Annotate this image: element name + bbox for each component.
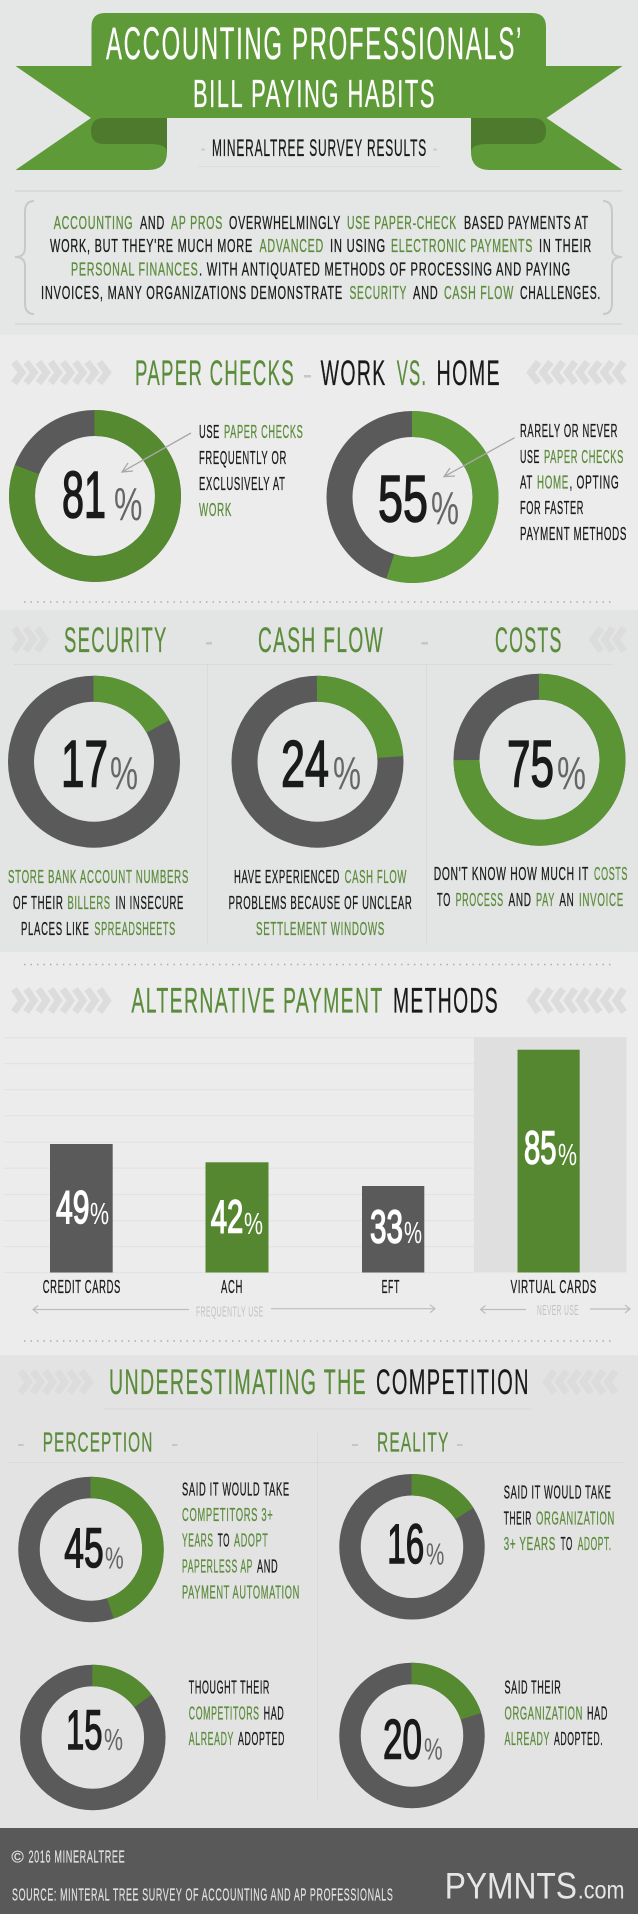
- subheading: reality: REALITY: [377, 1427, 450, 1458]
- donut: 24%: 24: [281, 726, 329, 800]
- donut: 16%: [350, 1485, 474, 1609]
- intro paragraph: INVOICES, MANY ORGANIZATIONS DEMONSTRATE: [41, 282, 343, 303]
- text: 45%: TO: [218, 1531, 230, 1551]
- intro paragraph: ACCOUNTING: [54, 212, 133, 233]
- heading: underestimating the competition: UNDERESTIMATING THE: [109, 1363, 367, 1402]
- bar: eft 33%: 33: [370, 1200, 403, 1252]
- subheading: perception: PERCEPTION: [43, 1427, 153, 1458]
- arrow: 81%: [122, 433, 191, 472]
- bar labels: CREDIT CARDS: [43, 1276, 121, 1297]
- bar: credit cards 49%: 49: [56, 1181, 90, 1233]
- subtitle: -: [433, 135, 438, 162]
- bar: virtual cards 85%: 85: [524, 1122, 556, 1174]
- intro paragraph: OVERWHELMINGLY: [229, 212, 341, 233]
- title: BILL PAYING HABITS: [193, 73, 436, 116]
- footer: ©: [11, 1848, 25, 1866]
- donut: 55%: [340, 424, 486, 570]
- intro paragraph: ELECTRONIC PAYMENTS: [391, 235, 533, 256]
- intro paragraph: PERSONAL FINANCES: [71, 258, 198, 280]
- chevrons: paper checks left: [14, 362, 107, 383]
- donut: 55%: %: [431, 482, 459, 534]
- text: 45%: YEARS: [182, 1531, 214, 1551]
- donut: 15%: [31, 1676, 155, 1800]
- donut: 81%: 81: [62, 458, 106, 532]
- heading: alternative payment methods: METHODS: [393, 982, 499, 1020]
- text: 81%: [199, 421, 304, 520]
- donut: 16%: 16: [387, 1512, 424, 1575]
- intro paragraph: CASH FLOW: [444, 282, 514, 303]
- intro paragraph: AND: [140, 212, 165, 233]
- text: 45%: PAYMENT AUTOMATION: [182, 1582, 300, 1602]
- heading: paper checks work vs home: HOME: [436, 354, 501, 393]
- text: ADOPTED: [238, 1729, 285, 1749]
- text: 15%: COMPETITORS: [189, 1703, 260, 1723]
- caption: security: BILLERS: [68, 892, 111, 913]
- caption: security: STORE BANK ACCOUNT NUMBERS: [8, 866, 189, 887]
- chevrons: methods left: [14, 989, 107, 1012]
- range: never use: NEVER USE: [537, 1303, 579, 1319]
- footer: 2016 MINERALTREE: [28, 1846, 125, 1866]
- caption: costs: AND: [508, 889, 532, 910]
- brace left: [15, 201, 34, 314]
- text: 45%: ADOPT: [234, 1531, 268, 1551]
- footer: [0, 1828, 638, 1914]
- bar: virtual cards 85%: [518, 1050, 580, 1272]
- donut: 20%: %: [424, 1731, 443, 1766]
- bar: eft 33%: [362, 1186, 424, 1272]
- donut: 16%: %: [426, 1536, 444, 1571]
- text: PAPER CHECKS: [224, 421, 304, 442]
- subheading: reality: [352, 1427, 463, 1458]
- text: 15%: HAD: [264, 1703, 284, 1723]
- text: 55%: AT: [520, 472, 533, 492]
- text: 45%: PAPERLESS AP: [182, 1556, 253, 1576]
- heading row: security, cash flow, costs: SECURITY: [64, 621, 168, 660]
- range: frequently use: FREQUENTLY USE: [196, 1305, 264, 1321]
- text: 16%: [504, 1483, 615, 1554]
- heading: alternative payment methods: ALTERNATIVE PAYMENT: [131, 982, 384, 1020]
- heading row: security, cash flow, costs: COSTS: [495, 621, 563, 660]
- text: 81%: EXCLUSIVELY AT: [199, 473, 286, 494]
- title: [106, 18, 523, 116]
- text: 20%: ALREADY: [504, 1729, 550, 1749]
- chevrons: security left: [14, 628, 45, 651]
- caption: cash flow: CASH FLOW: [345, 866, 407, 887]
- text: 15%: [189, 1678, 285, 1749]
- bar: credit cards 49%: %: [90, 1196, 109, 1231]
- bar chart: [4, 1037, 626, 1273]
- intro paragraph: [41, 212, 601, 303]
- text: 81%: WORK: [199, 499, 232, 520]
- subtitle: [198, 135, 440, 167]
- caption: cash flow: SETTLEMENT WINDOWS: [256, 918, 385, 939]
- text: 81%: USE: [199, 421, 220, 442]
- donut: 45%: 45: [64, 1516, 104, 1579]
- banner ribbon: [16, 13, 622, 170]
- text: 16%: 3+ YEARS: [504, 1534, 556, 1554]
- donut: 15%: 15: [66, 1698, 102, 1761]
- donut: 17%: [21, 689, 167, 835]
- text: 16%: TO: [561, 1534, 573, 1554]
- text: 45%: SAID IT WOULD TAKE: [182, 1479, 290, 1499]
- donut: 24%: %: [333, 747, 361, 799]
- heading: paper checks work vs home: VS.: [397, 354, 427, 393]
- subtitle: MINERALTREE SURVEY RESULTS: [212, 135, 427, 162]
- chevrons: competition right: [546, 1371, 616, 1393]
- caption: cash flow: PROBLEMS BECAUSE OF UNCLEAR: [229, 892, 412, 913]
- subtitle: -: [201, 135, 206, 162]
- text: 20%: HAD: [587, 1703, 608, 1723]
- text: 20%: SAID THEIR: [504, 1678, 561, 1698]
- text: 45%: AND: [257, 1556, 278, 1576]
- heading row: security, cash flow, costs: CASH FLOW: [258, 621, 384, 660]
- text: 55%: [520, 420, 627, 544]
- text: 55%: USE: [520, 446, 540, 467]
- text: 15%: THOUGHT THEIR: [189, 1678, 270, 1698]
- intro paragraph: SECURITY: [350, 282, 407, 303]
- donut: 45%: %: [105, 1540, 124, 1575]
- donut: 17%: %: [110, 747, 138, 799]
- chevrons: competition left: [20, 1371, 90, 1393]
- heading: underestimating the competition: COMPETITION: [376, 1363, 530, 1402]
- donut: 55%: 55: [378, 462, 428, 536]
- bar labels: EFT: [382, 1276, 400, 1297]
- caption: security: SPREADSHEETS: [94, 918, 176, 939]
- donut: 20%: [350, 1674, 474, 1798]
- bar: ach 42%: %: [244, 1206, 263, 1241]
- donut: 81%: %: [114, 478, 142, 530]
- text: 81%: FREQUENTLY OR: [199, 447, 287, 468]
- donut: 24%: [244, 689, 390, 835]
- donut: 75%: 75: [507, 726, 554, 800]
- caption: costs: [434, 863, 628, 910]
- intro paragraph: USE PAPER-CHECK: [347, 212, 457, 233]
- donut: 17%: 17: [61, 726, 108, 800]
- bar labels: ACH: [221, 1276, 243, 1297]
- text: 45%: COMPETITORS 3+: [182, 1505, 273, 1525]
- bar: credit cards 49%: [50, 1144, 113, 1272]
- chevrons: paper checks right: [531, 362, 624, 383]
- donut: 75%: [466, 687, 612, 833]
- bar labels: [43, 1276, 597, 1297]
- caption: costs: PROCESS: [456, 889, 504, 910]
- arrow: 55%: [444, 438, 515, 477]
- logo: pymnts.com: PYMNTS: [445, 1865, 577, 1906]
- text: 55%: HOME: [537, 472, 569, 492]
- logo: pymnts.com: .com: [578, 1876, 624, 1904]
- caption: security: PLACES LIKE: [21, 918, 90, 939]
- caption: costs: TO: [437, 889, 451, 910]
- range: frequently use: [33, 1305, 435, 1321]
- bar: eft 33%: %: [404, 1215, 422, 1250]
- heading: paper checks work vs home: WORK: [321, 354, 387, 393]
- caption: security: OF THEIR: [13, 892, 64, 913]
- bar: virtual cards 85%: %: [558, 1137, 577, 1172]
- bar: ach 42%: 42: [211, 1191, 243, 1243]
- text: 15%: ALREADY: [189, 1729, 234, 1749]
- donut: 20%: 20: [383, 1707, 422, 1770]
- donut: 15%: %: [104, 1722, 123, 1757]
- heading: paper checks work vs home: PAPER CHECKS: [135, 354, 295, 393]
- heading row: security, cash flow, costs: [64, 621, 563, 660]
- chevrons: costs right: [593, 628, 624, 651]
- bar: ach 42%: [206, 1162, 268, 1272]
- text: 16%: THEIR: [504, 1508, 532, 1528]
- brace right: [603, 201, 622, 314]
- caption: costs: AN: [559, 889, 574, 910]
- text: 45%: [182, 1479, 300, 1602]
- donut: 81%: [22, 423, 168, 569]
- caption: security: [8, 866, 189, 939]
- caption: costs: PAY: [536, 889, 555, 910]
- intro paragraph: IN USING: [330, 235, 386, 256]
- intro paragraph: WORK, BUT THEY'RE MUCH MORE: [50, 235, 253, 256]
- caption: security: IN INSECURE: [116, 892, 184, 913]
- caption: cash flow: HAVE EXPERIENCED: [234, 866, 340, 887]
- donut: 75%: %: [557, 747, 586, 799]
- text: 20%: [504, 1678, 608, 1749]
- intro paragraph: AND: [413, 282, 438, 303]
- range: never use: [480, 1303, 630, 1319]
- chevrons: methods right: [531, 989, 624, 1012]
- intro paragraph: IN THEIR: [539, 235, 592, 256]
- intro paragraph: AP PROS: [171, 212, 223, 233]
- donut: 45%: [29, 1488, 153, 1612]
- intro paragraph: ADVANCED: [260, 235, 324, 256]
- caption: cash flow: [229, 866, 412, 939]
